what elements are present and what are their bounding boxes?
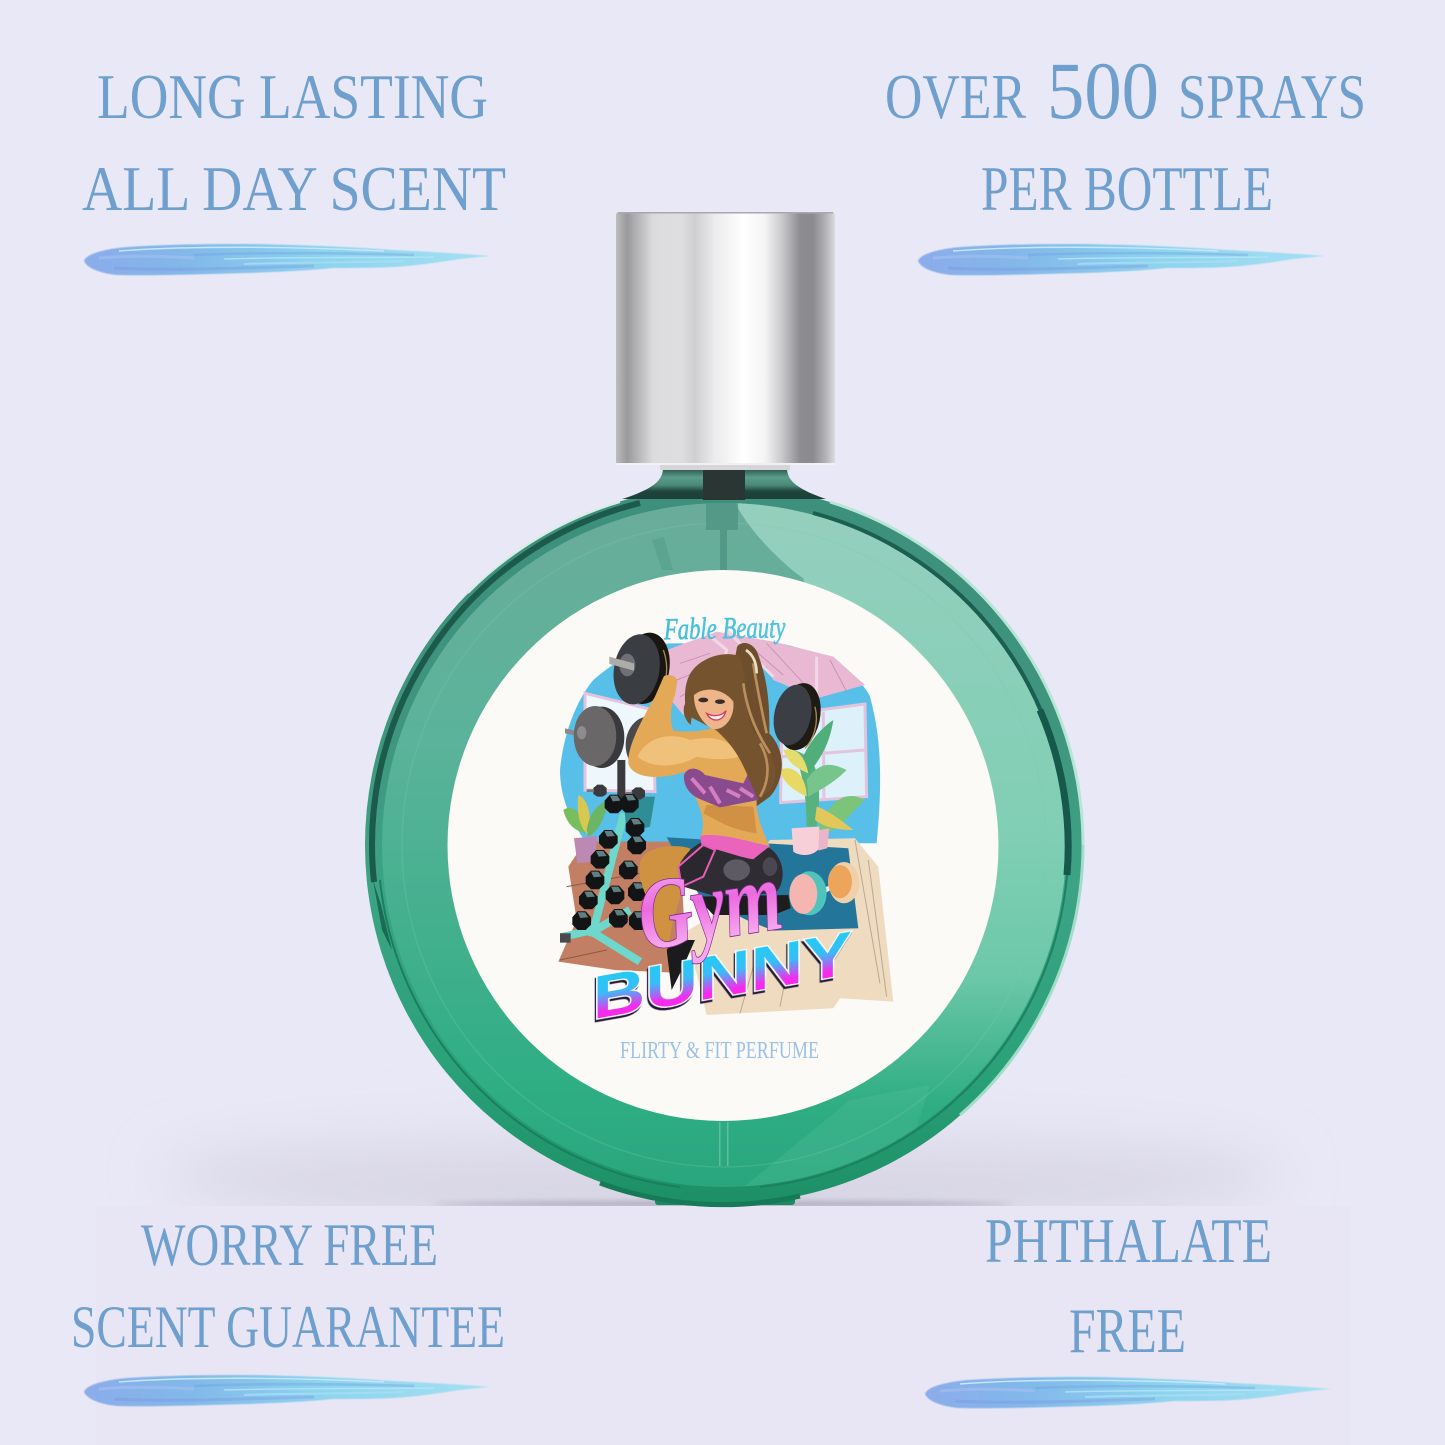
label illustration <box>558 610 893 1032</box>
face <box>694 690 734 729</box>
feature: phthalate free: FREE <box>1069 1295 1186 1366</box>
plants and pots <box>563 720 865 863</box>
feature: long lasting all day scent: ALL DAY SCENT <box>82 153 506 224</box>
sports bra <box>684 769 758 807</box>
feature: over 500 sprays per bottle: OVER <box>885 61 1026 132</box>
feature: phthalate free <box>985 1205 1272 1366</box>
label <box>448 570 998 1121</box>
dumbbell rack <box>560 785 655 962</box>
spray tube <box>706 500 738 570</box>
title: BUNNY: BUNNY <box>593 918 852 1032</box>
brush stroke <box>84 1375 490 1406</box>
perfume cap <box>616 212 835 500</box>
brush stroke <box>925 1377 1331 1408</box>
rack pole <box>617 760 625 798</box>
floor wood <box>683 838 893 1015</box>
feature: over 500 sprays per bottle: 500 <box>1047 45 1159 136</box>
left weight plates <box>565 706 671 773</box>
bottle neck <box>622 468 826 499</box>
brush stroke <box>918 244 1324 275</box>
feature: worry free scent guarantee: WORRY FREE <box>141 1212 438 1278</box>
bottle body <box>365 486 1083 1205</box>
glass highlight <box>736 503 1065 1088</box>
feature: phthalate free: PHTHALATE <box>985 1205 1272 1276</box>
brand: Fable Beauty: Fable Beauty <box>663 610 786 646</box>
feature: worry free scent guarantee: SCENT GUARANTEE <box>71 1294 505 1360</box>
brush stroke <box>84 244 490 275</box>
pastel barbell <box>789 862 859 915</box>
top barbell <box>608 629 675 708</box>
roof <box>667 632 865 715</box>
perfume bottle <box>365 212 1083 1205</box>
bench <box>697 895 791 915</box>
hair front <box>685 654 775 800</box>
shorts <box>680 842 783 897</box>
thigh <box>639 846 690 953</box>
title: Gym: Gym <box>630 840 789 972</box>
windows <box>585 693 655 792</box>
exercise mat <box>667 837 858 931</box>
dark rim reflections <box>372 503 640 882</box>
feature: over 500 sprays per bottle: SPRAYS <box>1178 61 1366 132</box>
feature: over 500 sprays per bottle: PER BOTTLE <box>981 153 1273 224</box>
woman body <box>628 650 791 990</box>
feature: worry free scent guarantee <box>71 1212 505 1360</box>
feature: over 500 sprays per bottle <box>885 45 1366 224</box>
room wall <box>560 643 880 843</box>
feature: long lasting all day scent <box>82 61 506 224</box>
feature: long lasting all day scent: LONG LASTING <box>97 61 488 132</box>
right plate <box>768 679 827 754</box>
tagline: FLIRTY & FIT PERFUME <box>620 1038 819 1064</box>
lower backdrop <box>96 1206 1350 1445</box>
hair back and ponytail <box>727 643 782 807</box>
floor shadow <box>207 1140 1239 1206</box>
